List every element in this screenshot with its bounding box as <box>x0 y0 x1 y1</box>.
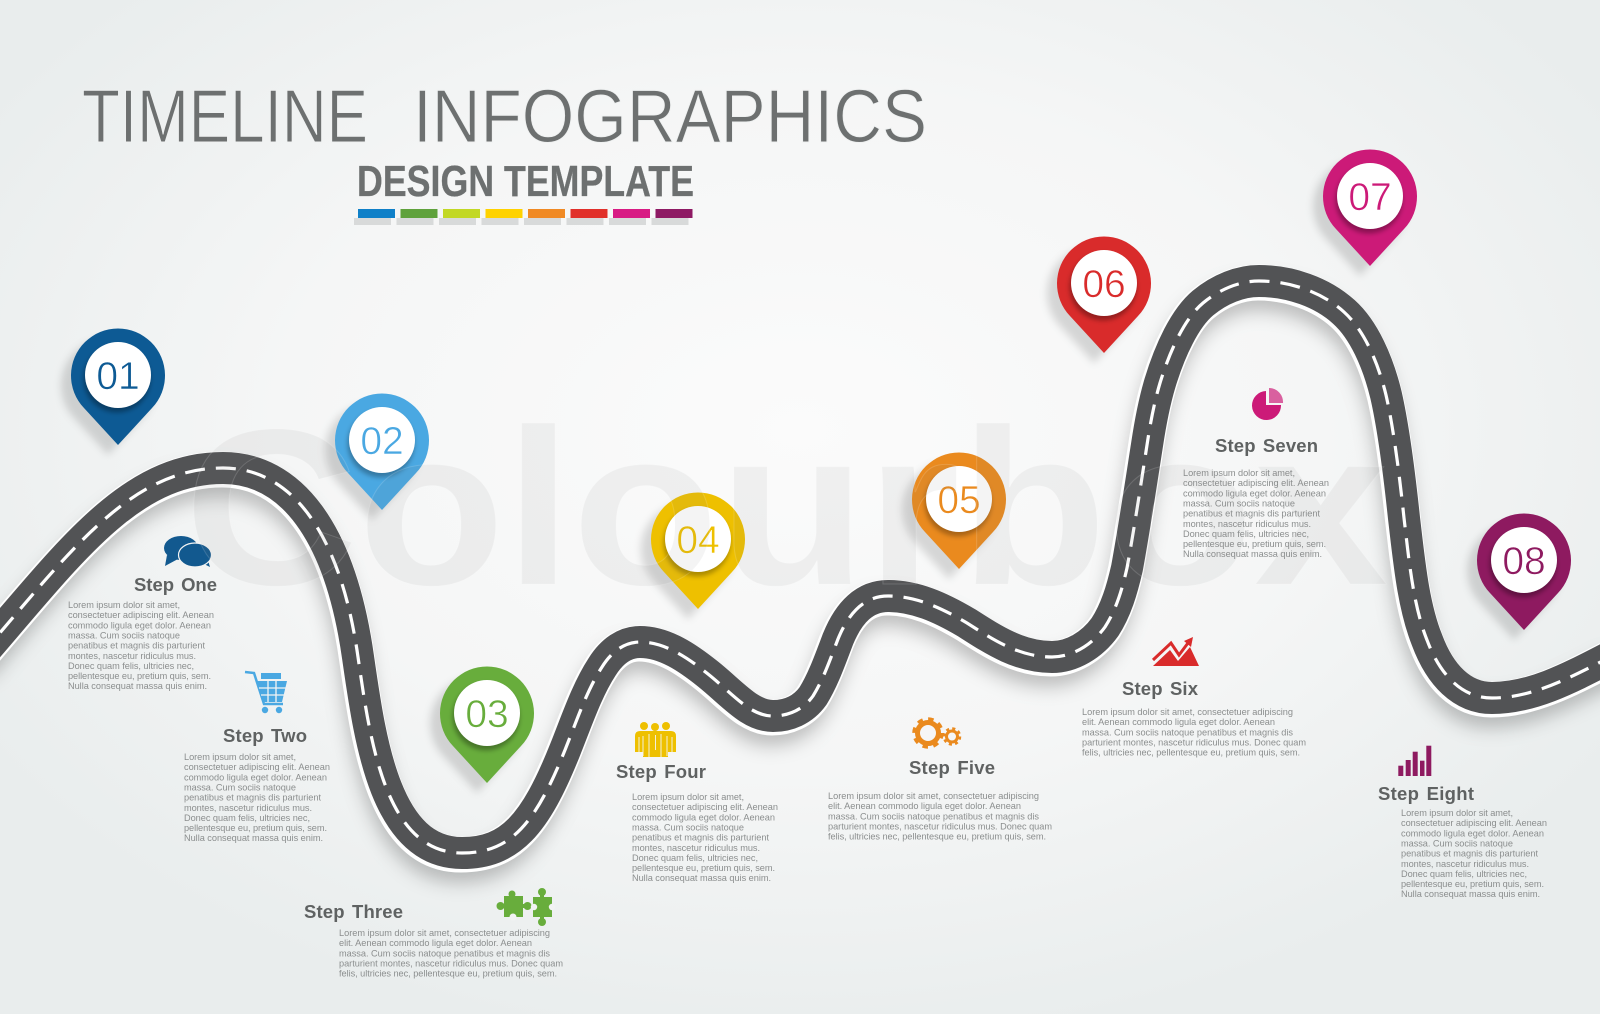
text: step four: penatibus et magnis dis parturient <box>632 833 769 843</box>
text: step seven: commodo ligula eget dolor. Aenean <box>1183 488 1326 498</box>
pin 04: 04 <box>676 519 720 562</box>
text: step two: Donec quam felis, ultricies nec, <box>184 813 310 823</box>
text: step six <box>1082 707 1306 758</box>
text: step one: Nulla consequat massa quis enim. <box>68 681 207 691</box>
text: step two: massa. Cum sociis natoque <box>184 782 296 792</box>
text: step one: penatibus et magnis dis parturient <box>68 641 205 651</box>
text: step seven: penatibus et magnis dis parturient <box>1183 509 1320 519</box>
text: step seven: montes, nascetur ridiculus mus. <box>1183 519 1311 529</box>
heading: step seven: Step Seven <box>1215 435 1318 456</box>
text: step four: pellentesque eu, pretium quis, sem. <box>632 863 775 873</box>
text: step six: felis, ultricies nec, pellentesque eu, pretium quis, sem. <box>1082 748 1300 758</box>
pin 08 <box>1467 514 1571 640</box>
icon: gears <box>914 719 960 747</box>
text: step three: massa. Cum sociis natoque penatibus et magnis dis <box>339 948 550 958</box>
text: step four: consectetuer adipiscing elit. Aenean <box>632 802 778 812</box>
subtitle: DESIGN TEMPLATE <box>357 157 694 206</box>
watermark: Colourbox <box>184 384 1388 632</box>
heading: step five: Step Five <box>909 757 995 778</box>
pin 04 <box>641 493 745 619</box>
text: step eight: Nulla consequat massa quis enim. <box>1401 889 1540 899</box>
text: step three <box>339 928 563 979</box>
pin 05 <box>902 453 1006 579</box>
text: step three: felis, ultricies nec, pellentesque eu, pretium quis, sem. <box>339 969 557 979</box>
text: step four: Nulla consequat massa quis enim. <box>632 873 771 883</box>
text: step seven: Donec quam felis, ultricies nec, <box>1183 529 1309 539</box>
text: step five: parturient montes, nascetur ridiculus mus. Donec quam <box>828 821 1052 831</box>
title <box>82 74 927 158</box>
text: step four: commodo ligula eget dolor. Aenean <box>632 812 775 822</box>
text: step seven: Lorem ipsum dolor sit amet, <box>1183 468 1295 478</box>
text: step eight: Lorem ipsum dolor sit amet, <box>1401 808 1513 818</box>
pin 07 <box>1313 150 1417 276</box>
icon: shopping cart <box>245 672 287 713</box>
text: step three: elit. Aenean commodo ligula eget dolor. Aenean <box>339 938 532 948</box>
text: step one: montes, nascetur ridiculus mus. <box>68 651 196 661</box>
text: step three: parturient montes, nascetur ridiculus mus. Donec quam <box>339 958 563 968</box>
text: step six: Lorem ipsum dolor sit amet, consectetuer adipiscing <box>1082 707 1293 717</box>
text: step four: montes, nascetur ridiculus mus. <box>632 843 760 853</box>
text: step five: felis, ultricies nec, pellentesque eu, pretium quis, sem. <box>828 832 1046 842</box>
text: step two: Lorem ipsum dolor sit amet, <box>184 752 296 762</box>
text: step four: Lorem ipsum dolor sit amet, <box>632 792 744 802</box>
text: step eight: montes, nascetur ridiculus mus. <box>1401 859 1529 869</box>
text: step five <box>828 791 1052 842</box>
text: step two <box>184 752 330 843</box>
icon: rising chart <box>1153 637 1199 666</box>
pin 03 <box>430 667 534 793</box>
text: step two: pellentesque eu, pretium quis, sem. <box>184 823 327 833</box>
heading: step six: Step Six <box>1122 678 1199 699</box>
text: step two: Nulla consequat massa quis enim. <box>184 833 323 843</box>
text: step six: massa. Cum sociis natoque penatibus et magnis dis <box>1082 727 1293 737</box>
pin 02: 02 <box>360 420 404 463</box>
text: step eight: Donec quam felis, ultricies nec, <box>1401 869 1527 879</box>
pin 08: 08 <box>1502 540 1546 583</box>
pin 02 <box>325 394 429 520</box>
text: step five: Lorem ipsum dolor sit amet, consectetuer adipiscing <box>828 791 1039 801</box>
text: step two: montes, nascetur ridiculus mus. <box>184 803 312 813</box>
text: step three: Lorem ipsum dolor sit amet, consectetuer adipiscing <box>339 928 550 938</box>
text: step four: massa. Cum sociis natoque <box>632 822 744 832</box>
text: step seven: Nulla consequat massa quis enim. <box>1183 549 1322 559</box>
icon: pie chart <box>1252 388 1283 420</box>
text: step six: elit. Aenean commodo ligula eget dolor. Aenean <box>1082 717 1275 727</box>
heading: step eight: Step Eight <box>1378 783 1474 804</box>
text: step four: Donec quam felis, ultricies nec, <box>632 853 758 863</box>
icon: chat bubbles <box>164 536 212 567</box>
text: step seven: massa. Cum sociis natoque <box>1183 498 1295 508</box>
text: step seven: pellentesque eu, pretium quis, sem. <box>1183 539 1326 549</box>
text: step seven: consectetuer adipiscing elit. Aenean <box>1183 478 1329 488</box>
text: step eight: commodo ligula eget dolor. Aenean <box>1401 828 1544 838</box>
text: step two: penatibus et magnis dis parturient <box>184 793 321 803</box>
heading: step one: Step One <box>134 574 217 595</box>
pin 06 <box>1047 237 1151 363</box>
pin 01 <box>61 329 165 455</box>
colour bar legend <box>354 209 692 225</box>
title: INFOGRAPHICS <box>413 74 927 158</box>
title: TIMELINE <box>82 74 368 158</box>
text: step two: consectetuer adipiscing elit. Aenean <box>184 762 330 772</box>
winding road <box>0 281 1600 867</box>
text: step one: massa. Cum sociis natoque <box>68 630 180 640</box>
heading: step four: Step Four <box>616 761 706 782</box>
heading: step three: Step Three <box>304 901 403 922</box>
text: step eight: massa. Cum sociis natoque <box>1401 838 1513 848</box>
text: step two: commodo ligula eget dolor. Aenean <box>184 772 327 782</box>
text: step one <box>68 600 214 691</box>
text: step one: consectetuer adipiscing elit. Aenean <box>68 610 214 620</box>
text: step eight: pellentesque eu, pretium quis, sem. <box>1401 879 1544 889</box>
icon: people group <box>635 722 676 757</box>
text: step six: parturient montes, nascetur ridiculus mus. Donec quam <box>1082 737 1306 747</box>
heading: step two: Step Two <box>223 725 307 746</box>
text: step one: Donec quam felis, ultricies nec, <box>68 661 194 671</box>
icon: bar chart <box>1398 746 1431 776</box>
text: step eight <box>1401 808 1547 899</box>
text: step eight: consectetuer adipiscing elit. Aenean <box>1401 818 1547 828</box>
text: step seven <box>1183 468 1329 559</box>
icon: puzzle pieces <box>496 888 555 926</box>
text: step one: commodo ligula eget dolor. Aenean <box>68 620 211 630</box>
pin 07: 07 <box>1348 176 1392 219</box>
text: step five: elit. Aenean commodo ligula eget dolor. Aenean <box>828 801 1021 811</box>
text: step one: pellentesque eu, pretium quis, sem. <box>68 671 211 681</box>
pin 06: 06 <box>1082 263 1126 306</box>
text: step eight: penatibus et magnis dis parturient <box>1401 849 1538 859</box>
pin 05: 05 <box>937 479 981 522</box>
pin 03: 03 <box>465 693 509 736</box>
text: step four <box>632 792 778 883</box>
text: step one: Lorem ipsum dolor sit amet, <box>68 600 180 610</box>
pin 01: 01 <box>96 355 140 398</box>
text: step five: massa. Cum sociis natoque penatibus et magnis dis <box>828 811 1039 821</box>
